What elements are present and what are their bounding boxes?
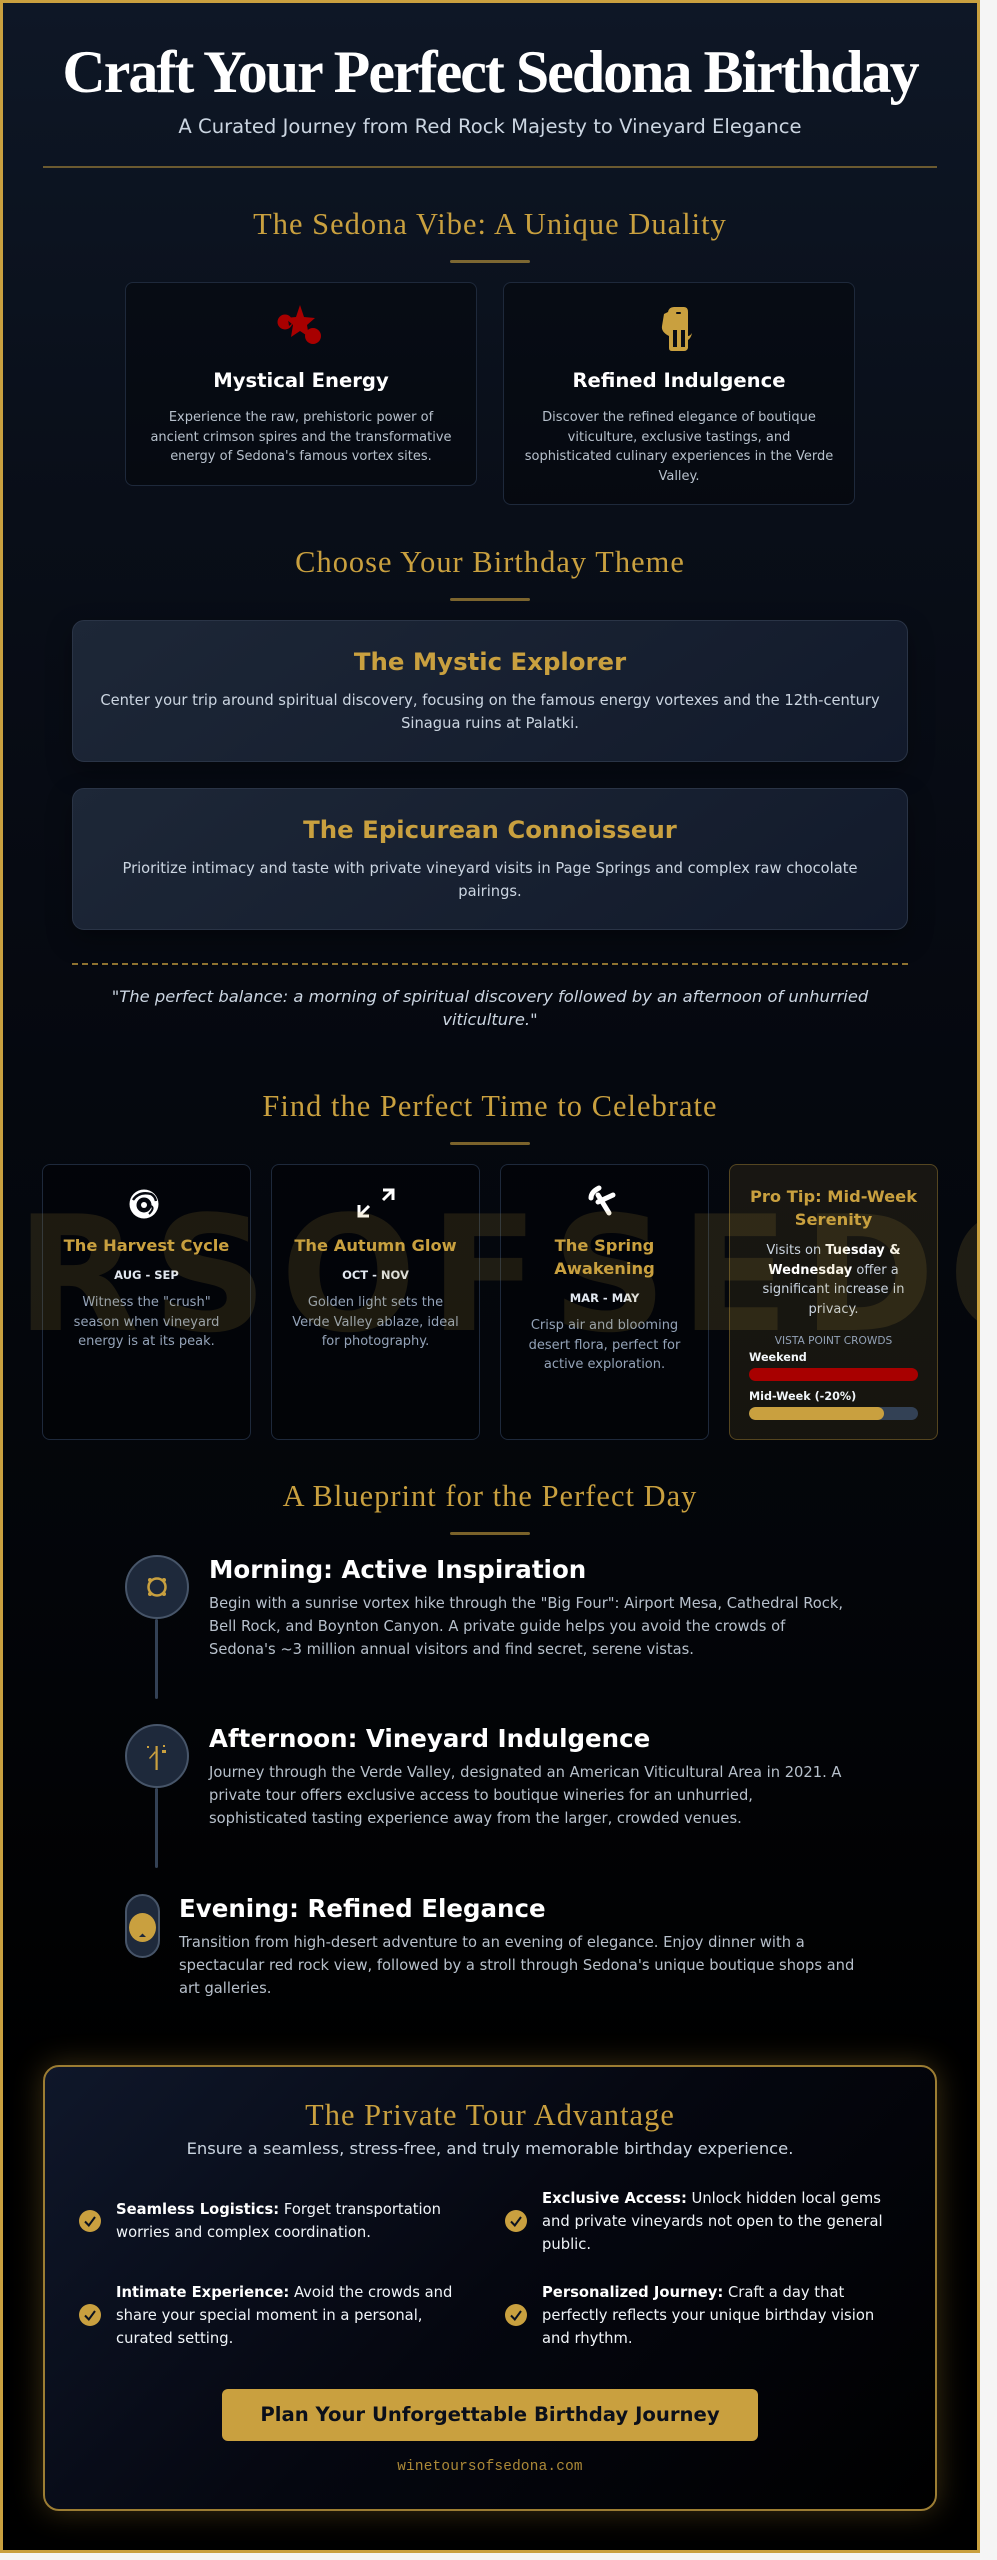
theme text: Prioritize intimacy and taste with private vineyard visits in Page Springs and complex raw chocolate [122, 860, 858, 877]
benefit text [116, 2284, 452, 2347]
call to action button [222, 2389, 758, 2441]
icon: check [505, 2210, 527, 2232]
quote: viticulture." [442, 1010, 538, 1029]
icon: blossom stroke [588, 1186, 616, 1216]
card text: Experience the raw, prehistoric power of [169, 410, 433, 425]
header divider [43, 166, 937, 168]
benefit text [542, 2284, 874, 2347]
card text [525, 410, 833, 484]
tip text: Visits on Tuesday & [766, 1243, 901, 1258]
season text: season when vineyard [74, 1314, 219, 1330]
season title [554, 1236, 655, 1278]
heading underline [450, 1142, 530, 1145]
item text: Bell Rock, and Boynton Canyon. A private guide helps you avoid the crowds of [209, 1618, 785, 1635]
benefit: intimate experience [79, 2284, 452, 2347]
benefit text: and private vineyards not open to the general [542, 2213, 883, 2230]
heading: birthday theme: Choose Your Birthday Theme [295, 545, 685, 579]
benefit: seamless logistics [79, 2201, 441, 2241]
card text [150, 410, 452, 464]
panel: spring awakening [500, 1164, 709, 1440]
item text: Begin with a sunrise vortex hike through the "Big Four": Airport Mesa, Cathedral Rock, [209, 1595, 843, 1612]
theme text: Center your trip around spiritual discovery, focusing on the famous energy vortexes and the 12th-century [100, 692, 880, 709]
icon: expand arrows [358, 1188, 394, 1218]
theme heading: The Mystic Explorer [354, 647, 626, 676]
icon: red star [278, 305, 321, 344]
call to action button: Plan Your Unforgettable Birthday Journey [260, 2403, 720, 2426]
icon: gold goblet [662, 307, 692, 351]
tip text [762, 1243, 905, 1316]
season title: The Harvest Cycle [64, 1236, 229, 1255]
timeline connector [155, 1619, 158, 1699]
item text [209, 1595, 843, 1658]
item text: spectacular red rock view, followed by a stroll through Sedona's unique boutique shops and [179, 1957, 854, 1974]
website url: winetoursofsedona.com [397, 2459, 583, 2475]
icon: vine stem [125, 1724, 189, 1788]
subtitle: A Curated Journey from Red Rock Majesty to Vineyard Elegance [178, 115, 802, 138]
benefit text: curated setting. [116, 2330, 233, 2347]
mid-week bar [749, 1407, 918, 1420]
theme heading: The Epicurean Connoisseur [303, 815, 677, 844]
card heading: Mystical Energy [213, 369, 389, 392]
card heading: Refined Indulgence [572, 369, 786, 392]
tip title: Pro Tip: Mid-Week [750, 1187, 917, 1206]
panel: refined indulgence [503, 282, 855, 505]
tip text: significant increase in [762, 1282, 905, 1297]
heading: perfect time: Find the Perfect Time to Celebrate [262, 1089, 718, 1123]
item text: Transition from high-desert adventure to an evening of elegance. Enjoy dinner with a [179, 1934, 805, 1951]
panel: mystical energy [125, 282, 477, 486]
weekend bar [749, 1368, 918, 1381]
season text: Crisp air and blooming [531, 1318, 678, 1333]
benefit: exclusive access [505, 2190, 883, 2253]
season text: Witness the "crush" [82, 1295, 211, 1310]
season dates: MAR - MAY [570, 1291, 639, 1305]
quote: "The perfect balance: a morning of spiritual discovery followed by an afternoon of unhurried [112, 987, 868, 1006]
tip text: Wednesday offer a [768, 1262, 899, 1278]
benefit text: Intimate Experience: Avoid the crowds and [116, 2284, 452, 2301]
timeline item: morning [125, 1555, 843, 1699]
item heading: Evening: Refined Elegance [179, 1894, 546, 1923]
dashed divider [72, 963, 908, 965]
theme text [122, 860, 858, 900]
item text: Journey through the Verde Valley, designated an American Viticultural Area in 2021. A [209, 1764, 841, 1781]
season text: energy is at its peak. [78, 1334, 215, 1349]
benefit text: public. [542, 2236, 591, 2253]
heading underline [450, 260, 530, 263]
icon: swirl [130, 1190, 158, 1218]
mid-week label: Mid-Week (-20%) [749, 1390, 856, 1403]
item text [208, 1764, 842, 1827]
card text: Discover the refined elegance of boutique [542, 410, 816, 425]
benefit text [542, 2190, 883, 2253]
card text: Valley. [658, 468, 700, 484]
tip title: Serenity [795, 1210, 872, 1229]
season title: The Spring [555, 1236, 654, 1255]
icon: sunrise ring [125, 1555, 189, 1619]
panel subtitle: Ensure a seamless, stress-free, and truly memorable birthday experience. [187, 2139, 793, 2158]
season text [292, 1295, 459, 1349]
season text: desert flora, perfect for [529, 1338, 680, 1352]
heading: blueprint: A Blueprint for the Perfect Day [283, 1479, 697, 1513]
card text: sophisticated culinary experiences in the Verde [525, 449, 833, 464]
benefit: personalized journey [505, 2284, 874, 2347]
timeline connector [155, 1788, 158, 1868]
timeline item: afternoon [125, 1724, 842, 1868]
benefit text: Exclusive Access: Unlock hidden local gems [542, 2190, 881, 2207]
icon: evening moon [125, 1894, 160, 1958]
season dates: OCT - NOV [342, 1268, 409, 1282]
season title: Awakening [554, 1259, 655, 1278]
item heading: Morning: Active Inspiration [209, 1555, 586, 1584]
card text: viticulture, exclusive tastings, and [568, 430, 790, 444]
heading underline [450, 1532, 530, 1535]
theme text [100, 692, 880, 732]
heading underline [450, 598, 530, 601]
chart label: VISTA POINT CROWDS [775, 1335, 892, 1347]
season text: Verde Valley ablaze, ideal [292, 1314, 459, 1330]
benefit text: worries and complex coordination. [116, 2224, 371, 2241]
panel: private tour advantage [43, 2065, 937, 2511]
benefit text: share your special moment in a personal, [116, 2307, 422, 2324]
timeline item: evening [125, 1894, 854, 1997]
icon: check [79, 2210, 101, 2232]
season text: active exploration. [544, 1357, 665, 1372]
panel: mystic explorer [72, 620, 908, 762]
item text [178, 1934, 854, 1997]
weekend label: Weekend [749, 1351, 807, 1364]
title: Craft Your Perfect Sedona Birthday [62, 39, 918, 105]
item text: private tour offers exclusive access to boutique wineries for an unhurried, [209, 1787, 753, 1804]
heading: the sedona vibe: The Sedona Vibe: A Unique Duality [253, 207, 727, 241]
item text: art galleries. [179, 1980, 271, 1997]
theme text: Sinagua ruins at Palatki. [401, 715, 579, 732]
benefit text [116, 2201, 441, 2241]
quote [112, 987, 868, 1029]
panel: pro tip [729, 1164, 938, 1440]
tip title [750, 1187, 918, 1229]
card text: ancient crimson spires and the transformative [150, 430, 452, 444]
panel: harvest cycle [42, 1164, 251, 1440]
season text: for photography. [322, 1334, 429, 1349]
icon: check [79, 2304, 101, 2326]
benefit text: perfectly reflects your unique birthday vision [542, 2307, 874, 2324]
card text: energy of Sedona's famous vortex sites. [170, 449, 432, 464]
item text: sophisticated tasting experience away from the larger, crowded venues. [209, 1810, 742, 1827]
benefit text: Personalized Journey: Craft a day that [542, 2284, 844, 2301]
season title: The Autumn Glow [294, 1236, 457, 1255]
season text [529, 1318, 680, 1372]
panel heading: The Private Tour Advantage [305, 2098, 675, 2132]
panel: epicurean connoisseur [72, 788, 908, 930]
season dates: AUG - SEP [114, 1268, 179, 1282]
theme text: pairings. [458, 883, 522, 900]
benefit text: and rhythm. [542, 2330, 633, 2347]
icon: check [505, 2304, 527, 2326]
item heading: Afternoon: Vineyard Indulgence [209, 1724, 650, 1753]
tip text: privacy. [808, 1302, 858, 1316]
item text: Sedona's ~3 million annual visitors and find secret, serene vistas. [209, 1641, 694, 1658]
season text: Golden light sets the [308, 1295, 443, 1310]
bar chart: vista crowds [749, 1351, 918, 1420]
benefit text: Seamless Logistics: Forget transportation [116, 2201, 441, 2218]
panel: autumn glow [271, 1164, 480, 1440]
season text [74, 1295, 219, 1349]
